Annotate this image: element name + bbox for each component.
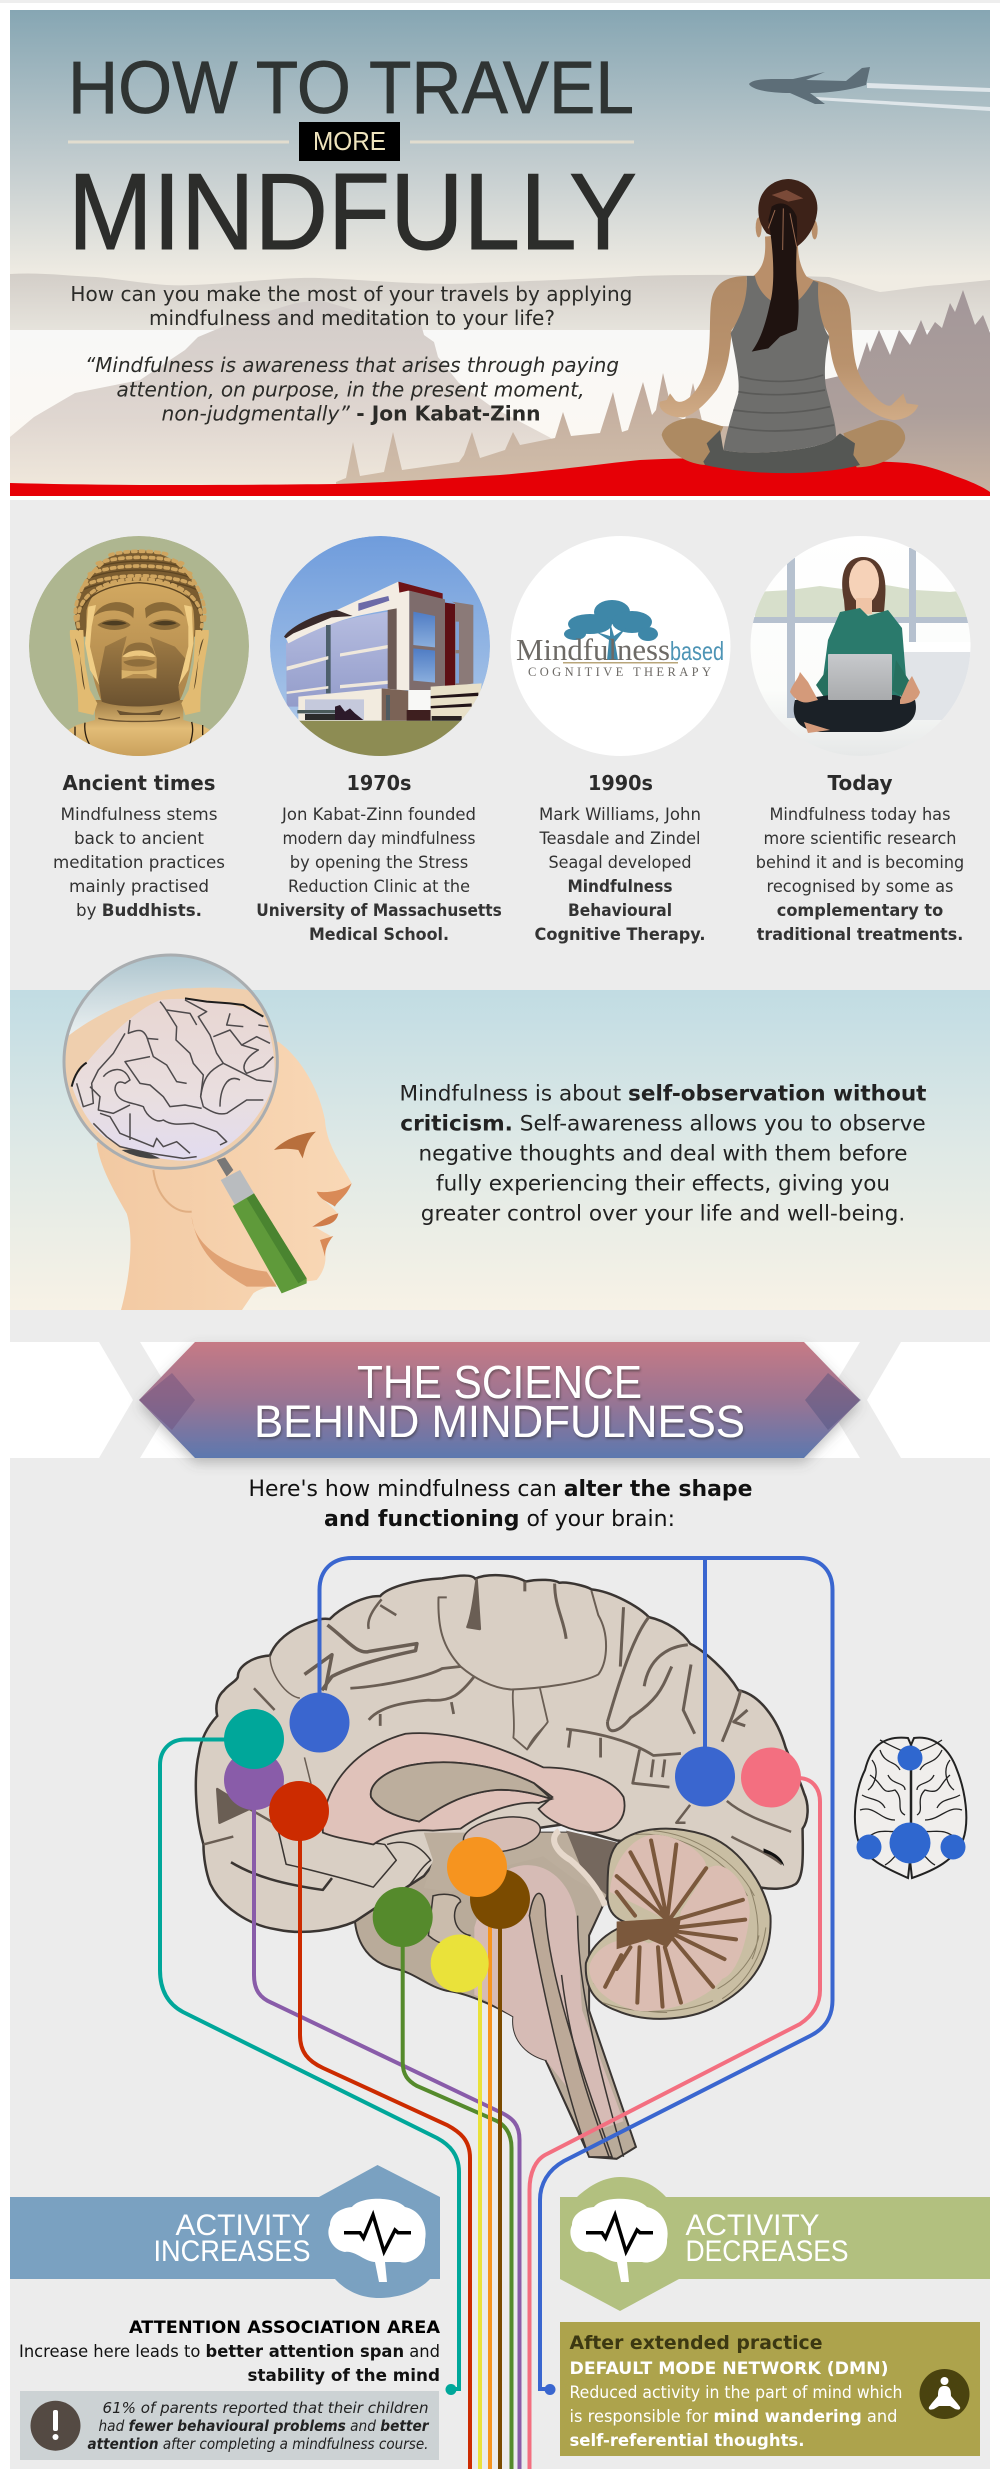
body text [53,805,225,920]
heading: Today [828,771,892,795]
banner: activity decreases: ACTIVITY [686,2209,820,2242]
timeline column: 1970s [256,536,502,944]
title rule and more badge [68,122,634,161]
body text: Jon Kabat-Zinn founded [281,805,476,824]
panel: hero header [10,10,990,497]
illustration: head with magnifying glass [60,950,352,1310]
body text: more scientific research [764,829,956,848]
callout: parents statistic [20,2391,439,2460]
timeline column: today [750,536,971,944]
body text: Behavioural [568,901,672,920]
icon: woman meditating with laptop [750,536,970,733]
intro question: mindfulness and meditation to your life? [149,306,555,330]
body text: Reduction Clinic at the [288,877,470,896]
body text: back to ancient [74,829,205,848]
body text: recognised by some as [766,877,954,896]
body text: fully experiencing their effects, giving you [436,1172,890,1197]
callout: after extended practice [560,2322,980,2456]
banner: activity increases: ACTIVITY [176,2209,310,2242]
body text: criticism. Self-awareness allows you to observe [400,1112,926,1137]
icon: mindfulness based cognitive therapy logo [510,536,730,756]
quote: non-judgmentally” - Jon Kabat-Zinn [162,402,540,426]
panel: self-observation [10,950,990,1310]
body text: greater control over your life and well-being. [421,1202,905,1227]
icon: buddha [29,536,249,757]
icon: magnifier handle [217,1157,307,1293]
intro text for brain diagram [248,1477,752,1532]
heading: 1970s [346,771,412,795]
icon: magnifying lens with brain [60,950,278,1169]
callout: after extended practice: After extended practice [570,2332,822,2354]
body text: traditional treatments. [757,925,963,944]
body text [256,805,502,944]
icon: clinic building [267,536,500,761]
intro question: How can you make the most of your travels by applying [70,282,632,306]
red ground [10,458,990,497]
body text: Mindfulness [568,877,673,896]
body text: Mindfulness is about self-observation without [400,1082,926,1107]
body text: by opening the Stress [290,853,468,872]
body text: Mindfulness today has [770,805,950,824]
callout: after extended practice: DEFAULT MODE NETWORK (DMN) [570,2359,888,2378]
quote: “Mindfulness is awareness that arises through paying [85,353,619,377]
panel: mindfulness timeline [29,536,971,944]
callout: after extended practice: is responsible for mind wandering and [570,2407,898,2426]
body text: Medical School. [309,925,449,944]
icon: exclamation mark [30,2401,80,2451]
banner: activity increases: INCREASES [154,2235,310,2268]
callout: parents statistic: 61% of parents reported that their children [102,2399,428,2417]
body text: negative thoughts and deal with them before [418,1142,908,1167]
body text: mainly practised [69,877,209,896]
body text [400,1082,926,1227]
text block: attention association area: ATTENTION ASSOCIATION AREA [129,2318,440,2337]
body text [534,805,706,944]
body text: Seagal developed [548,853,692,872]
brain illustration [196,1575,808,2159]
title: how to travel: HOW TO TRAVEL [68,46,634,129]
text block: attention association area: Increase here leads to better attention span and [19,2342,440,2361]
title rule and more badge: MORE [313,126,386,156]
body text: Teasdale and Zindel [539,829,700,848]
body text: Mindfulness stems [60,805,218,824]
text block: attention association area: stability of the mind [248,2366,440,2385]
intro text for brain diagram: and functioning of your brain: [324,1507,675,1532]
body text: University of Massachusetts [256,901,502,920]
body text: modern day mindfulness [282,829,476,848]
icon: mindfulness based cognitive therapy logo: Mindfulness [516,632,670,667]
quote [85,353,619,426]
connector lines [160,1558,832,2469]
marker dots [224,1692,801,2395]
banner: the science behind mindfulness [10,1342,990,1458]
body text: meditation practices [53,853,225,872]
icon: mindfulness based cognitive therapy logo: based [670,636,724,666]
icon: mindfulness based cognitive therapy logo: COGNITIVE THERAPY [528,665,711,679]
body text [756,805,964,944]
icon: meditation figure [920,2369,970,2419]
title: mindfully: MINDFULLY [68,151,637,273]
body text: Mark Williams, John [539,805,701,824]
hero sky and landscape [10,10,990,497]
body text: by Buddhists. [76,901,202,920]
icon: brain with pulse [328,2199,426,2282]
banner: activity decreases [560,2177,990,2311]
icon: brain with pulse [570,2199,668,2282]
body text: Cognitive Therapy. [534,925,706,944]
timeline column: 1990s [510,536,730,944]
heading: Ancient times [62,771,216,795]
banner: the science behind mindfulness: BEHIND MINDFULNESS [254,1396,745,1447]
callout: parents statistic: had fewer behavioural problems and better [98,2417,430,2435]
intro text for brain diagram: Here's how mindfulness can alter the shape [248,1477,752,1502]
body text: behind it and is becoming [756,853,964,872]
heading: 1990s [588,771,653,795]
meditating woman [659,179,918,473]
airplane [749,67,990,111]
icon: top view of brain with default mode network dots [855,1738,966,1878]
callout: after extended practice: self-referential thoughts. [570,2431,804,2450]
callout: parents statistic: attention after completing a mindfulness course. [88,2435,428,2453]
chart: annotated brain cross-section [160,1558,832,2469]
intro question [70,282,632,330]
banner: activity increases [10,2165,440,2298]
callout: after extended practice: Reduced activity in the part of mind which [570,2383,902,2402]
banner: activity decreases: DECREASES [686,2235,848,2268]
text block: attention association area [19,2318,440,2385]
banner: the science behind mindfulness: THE SCIENCE [357,1356,642,1408]
timeline column: ancient times [29,536,249,920]
body text: complementary to [777,901,943,920]
quote: attention, on purpose, in the present moment, [116,378,584,402]
